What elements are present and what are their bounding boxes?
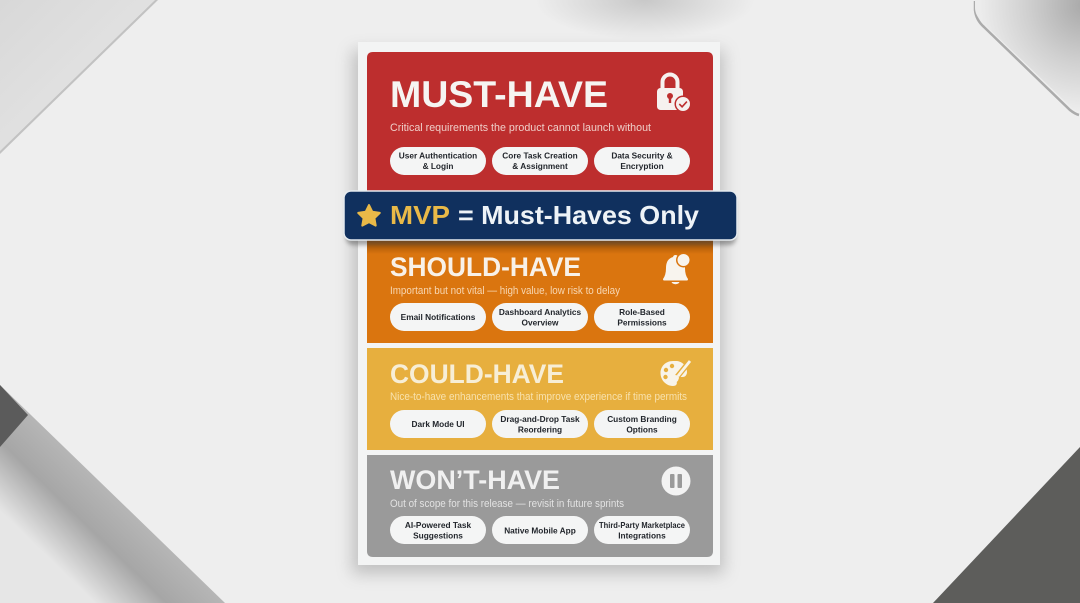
pill: third-party xyxy=(594,516,690,544)
pill: native mobile xyxy=(492,516,588,544)
pill: ai-powered: AI-Powered Task xyxy=(405,520,472,530)
pill: data security: Data Security & xyxy=(611,150,673,160)
pill: dashboard analytics xyxy=(492,303,588,331)
pill: core task creation: Core Task Creation xyxy=(502,150,578,160)
panel: should-have xyxy=(367,238,713,343)
pill: core task creation xyxy=(492,147,588,175)
pill: drag and drop: Reordering xyxy=(518,424,562,434)
pill: role-based: Role-Based xyxy=(619,307,665,317)
pill: dashboard analytics: Overview xyxy=(522,318,559,328)
pill: custom branding xyxy=(594,410,690,438)
paper card shadow xyxy=(352,50,724,574)
pill: email notifications: Email Notifications xyxy=(401,312,476,322)
heading: should-have: SHOULD-HAVE xyxy=(390,252,581,282)
pill: user authentication: & Login xyxy=(423,161,453,171)
panel: must-have xyxy=(367,52,713,192)
pill: user authentication xyxy=(390,147,486,175)
description: should-have: Important but not vital — high value, low risk to delay xyxy=(390,285,620,297)
pill: data security: Encryption xyxy=(620,161,664,171)
pill: third-party: Integrations xyxy=(618,530,666,540)
pill: ai-powered xyxy=(390,516,486,544)
icon: pause xyxy=(662,466,690,496)
pill: core task creation: & Assignment xyxy=(512,161,568,171)
paper card xyxy=(358,42,720,565)
icon: palette xyxy=(660,361,690,386)
pill: drag and drop: Drag-and-Drop Task xyxy=(500,414,580,424)
pill: custom branding: Options xyxy=(626,424,658,434)
description: must-have: Critical requirements the product cannot launch without xyxy=(390,122,651,134)
pill: dark mode: Dark Mode UI xyxy=(411,419,465,429)
banner text: Must-Haves Only: = Must-Haves Only xyxy=(458,200,700,230)
banner: MVP = Must-Haves Only xyxy=(344,191,737,240)
panel: could-have xyxy=(367,348,713,450)
pill: third-party: Third-Party Marketplace xyxy=(599,520,685,530)
description: could-have: Nice-to-have enhancements that improve experience if time permits xyxy=(390,391,687,403)
panel: won't-have xyxy=(367,455,713,557)
pill: role-based: Permissions xyxy=(617,318,667,328)
icon: bell xyxy=(663,252,691,284)
icon: lock with check xyxy=(657,75,692,112)
banner shadow xyxy=(346,197,736,245)
banner text: MVP: MVP xyxy=(390,200,450,230)
description: won't-have: Out of scope for this release — revisit in future sprints xyxy=(390,498,624,510)
heading: could-have: COULD-HAVE xyxy=(390,359,564,389)
heading: must-have: MUST-HAVE xyxy=(390,74,608,115)
pill: user authentication: User Authentication xyxy=(399,150,477,160)
pill: role-based xyxy=(594,303,690,331)
heading: won't-have: WON’T-HAVE xyxy=(390,465,560,495)
pill: dark mode xyxy=(390,410,486,438)
icon: star xyxy=(358,205,380,226)
pill: native mobile: Native Mobile App xyxy=(504,526,576,536)
pill: drag and drop xyxy=(492,410,588,438)
pill: ai-powered: Suggestions xyxy=(413,530,463,540)
pill: dashboard analytics: Dashboard Analytics xyxy=(499,307,581,317)
pill: custom branding: Custom Branding xyxy=(607,414,677,424)
pill: data security xyxy=(594,147,690,175)
pill: email notifications xyxy=(390,303,486,331)
